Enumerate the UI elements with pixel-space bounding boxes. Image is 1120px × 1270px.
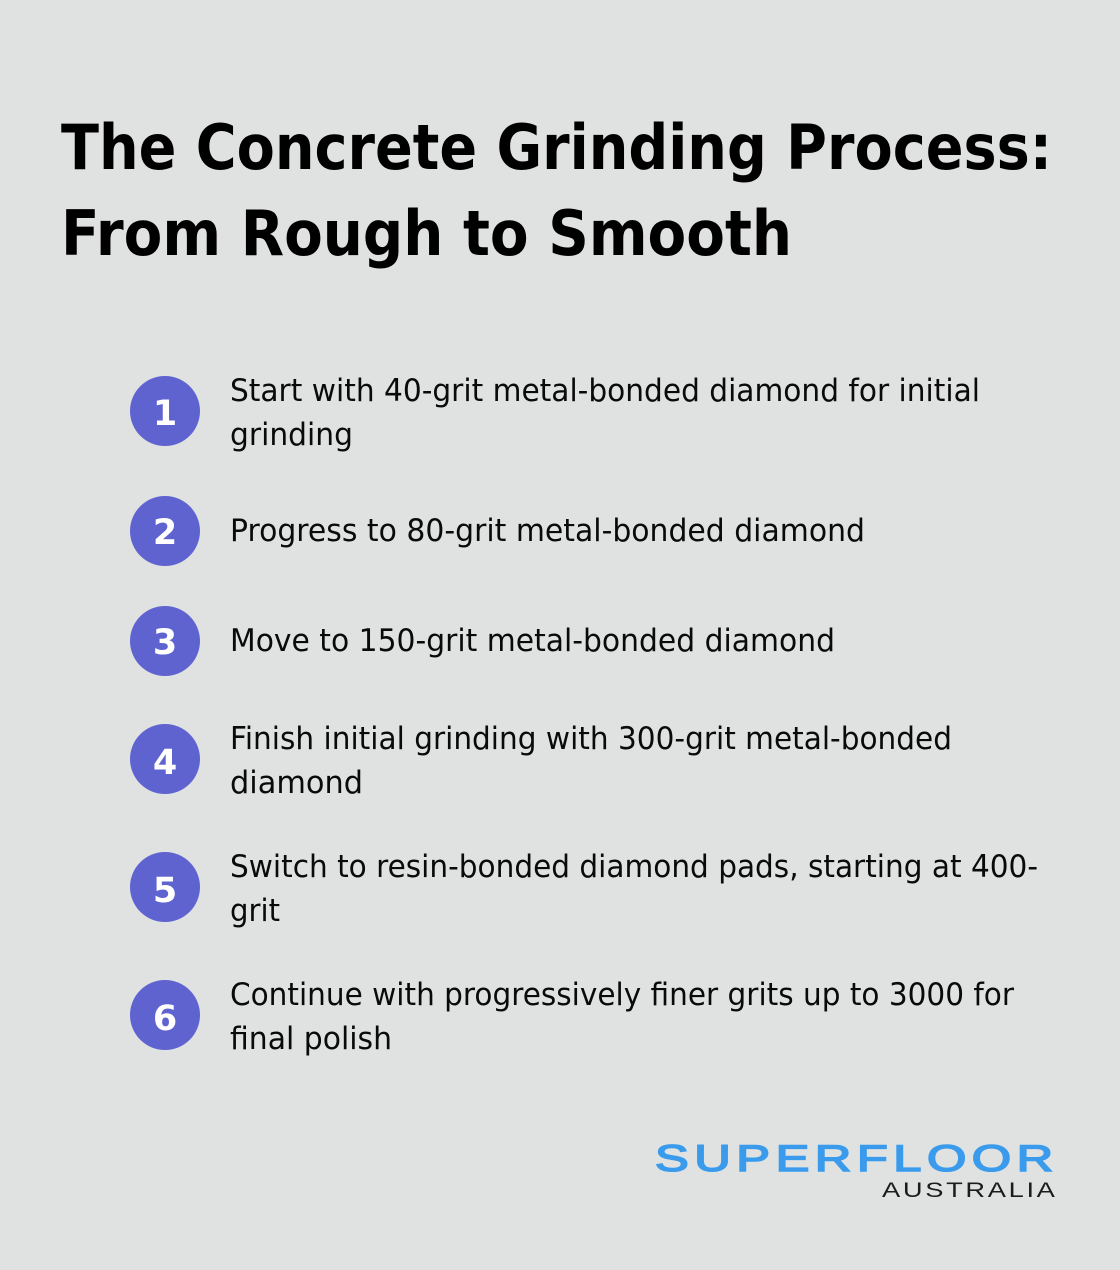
- step 4: [130, 721, 952, 801]
- step 2: [130, 496, 865, 566]
- step 3: Move to 150-grit metal-bonded diamond: [230, 623, 835, 659]
- step 6: [130, 977, 1014, 1057]
- step 5: [130, 849, 1038, 929]
- title: [61, 111, 1052, 270]
- step list: [130, 373, 1038, 1057]
- step 1: [130, 373, 980, 453]
- step 1: grinding: [230, 417, 353, 453]
- step 5: Switch to resin-bonded diamond pads, starting at 400-: [230, 849, 1038, 885]
- step 4: diamond: [230, 765, 363, 801]
- step 1: 1: [153, 394, 177, 434]
- step 3: 3: [153, 623, 177, 663]
- step 4: 4: [153, 743, 177, 783]
- logo: Superfloor Australia: [655, 1138, 1056, 1202]
- step 2: Progress to 80-grit metal-bonded diamond: [230, 513, 865, 549]
- step 2: 2: [153, 513, 177, 553]
- step 4: Finish initial grinding with 300-grit metal-bonded: [230, 721, 952, 757]
- title: From Rough to Smooth: [61, 197, 792, 270]
- step 6: Continue with progressively finer grits up to 3000 for: [230, 977, 1014, 1013]
- step 1: Start with 40-grit metal-bonded diamond for initial: [230, 373, 980, 409]
- step 3: [130, 606, 835, 676]
- step 6: 6: [153, 999, 177, 1039]
- logo: Superfloor Australia: AUSTRALIA: [882, 1179, 1056, 1202]
- step 5: 5: [153, 871, 177, 911]
- step 5: grit: [230, 893, 280, 929]
- step 6: final polish: [230, 1021, 392, 1057]
- logo: Superfloor Australia: SUPERFLOOR: [655, 1138, 1053, 1179]
